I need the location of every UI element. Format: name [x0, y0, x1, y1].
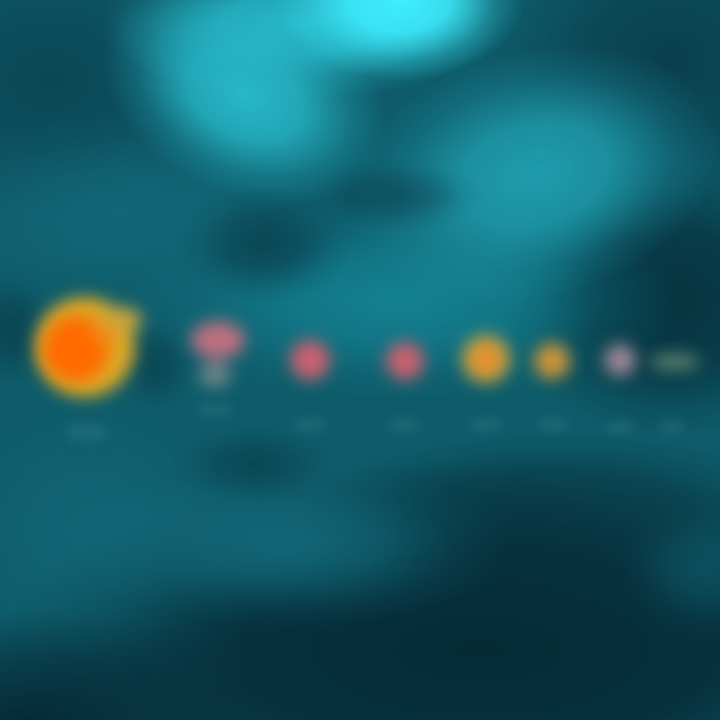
marker 6: amber circle	[534, 343, 570, 379]
marker 3: pink circle	[290, 340, 330, 380]
marker 1: large orange	[35, 297, 142, 397]
marker 7: mauve circle	[604, 344, 636, 376]
faint labels under markers	[68, 405, 684, 439]
marker 2: pink heart	[191, 321, 245, 387]
marker 8: olive bar	[649, 354, 701, 370]
marker 5: orange circle	[462, 335, 510, 383]
marker 4: pink circle	[386, 342, 424, 380]
